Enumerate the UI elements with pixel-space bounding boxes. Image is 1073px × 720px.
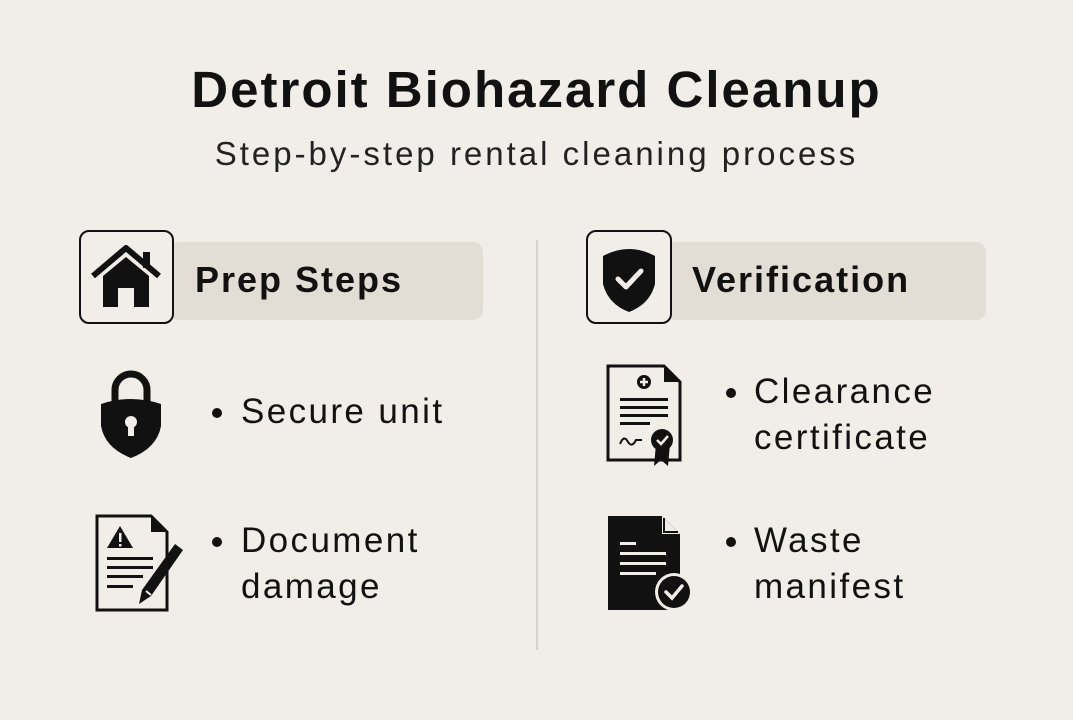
icon: lock <box>101 370 161 458</box>
panel: prep steps <box>79 230 483 612</box>
icon: clearance certificate <box>606 364 682 466</box>
item: waste manifest: manifest <box>754 567 905 606</box>
icon: document with warning and pencil <box>96 514 183 612</box>
header bar: verification <box>666 242 986 320</box>
icon: house <box>79 230 174 324</box>
header bar: prep steps <box>169 242 483 320</box>
item: waste manifest: Waste <box>754 521 864 560</box>
item: secure unit: Secure unit <box>241 392 444 431</box>
title: Detroit Biohazard Cleanup <box>191 61 882 118</box>
subtitle: Step-by-step rental cleaning process <box>215 135 858 172</box>
divider <box>536 240 538 650</box>
item: document damage: Document <box>241 521 420 560</box>
icon: waste manifest <box>608 516 690 610</box>
panel: verification <box>586 230 986 610</box>
item: clearance certificate: certificate <box>754 418 930 457</box>
item: clearance certificate <box>726 372 935 457</box>
item: document damage: damage <box>241 567 382 606</box>
item: clearance certificate: Clearance <box>754 372 935 411</box>
icon: shield check <box>586 230 672 324</box>
item: waste manifest <box>726 521 905 606</box>
item: document damage <box>212 521 420 606</box>
heading: prep steps: Prep Steps <box>195 259 403 300</box>
heading: verification: Verification <box>692 259 910 300</box>
